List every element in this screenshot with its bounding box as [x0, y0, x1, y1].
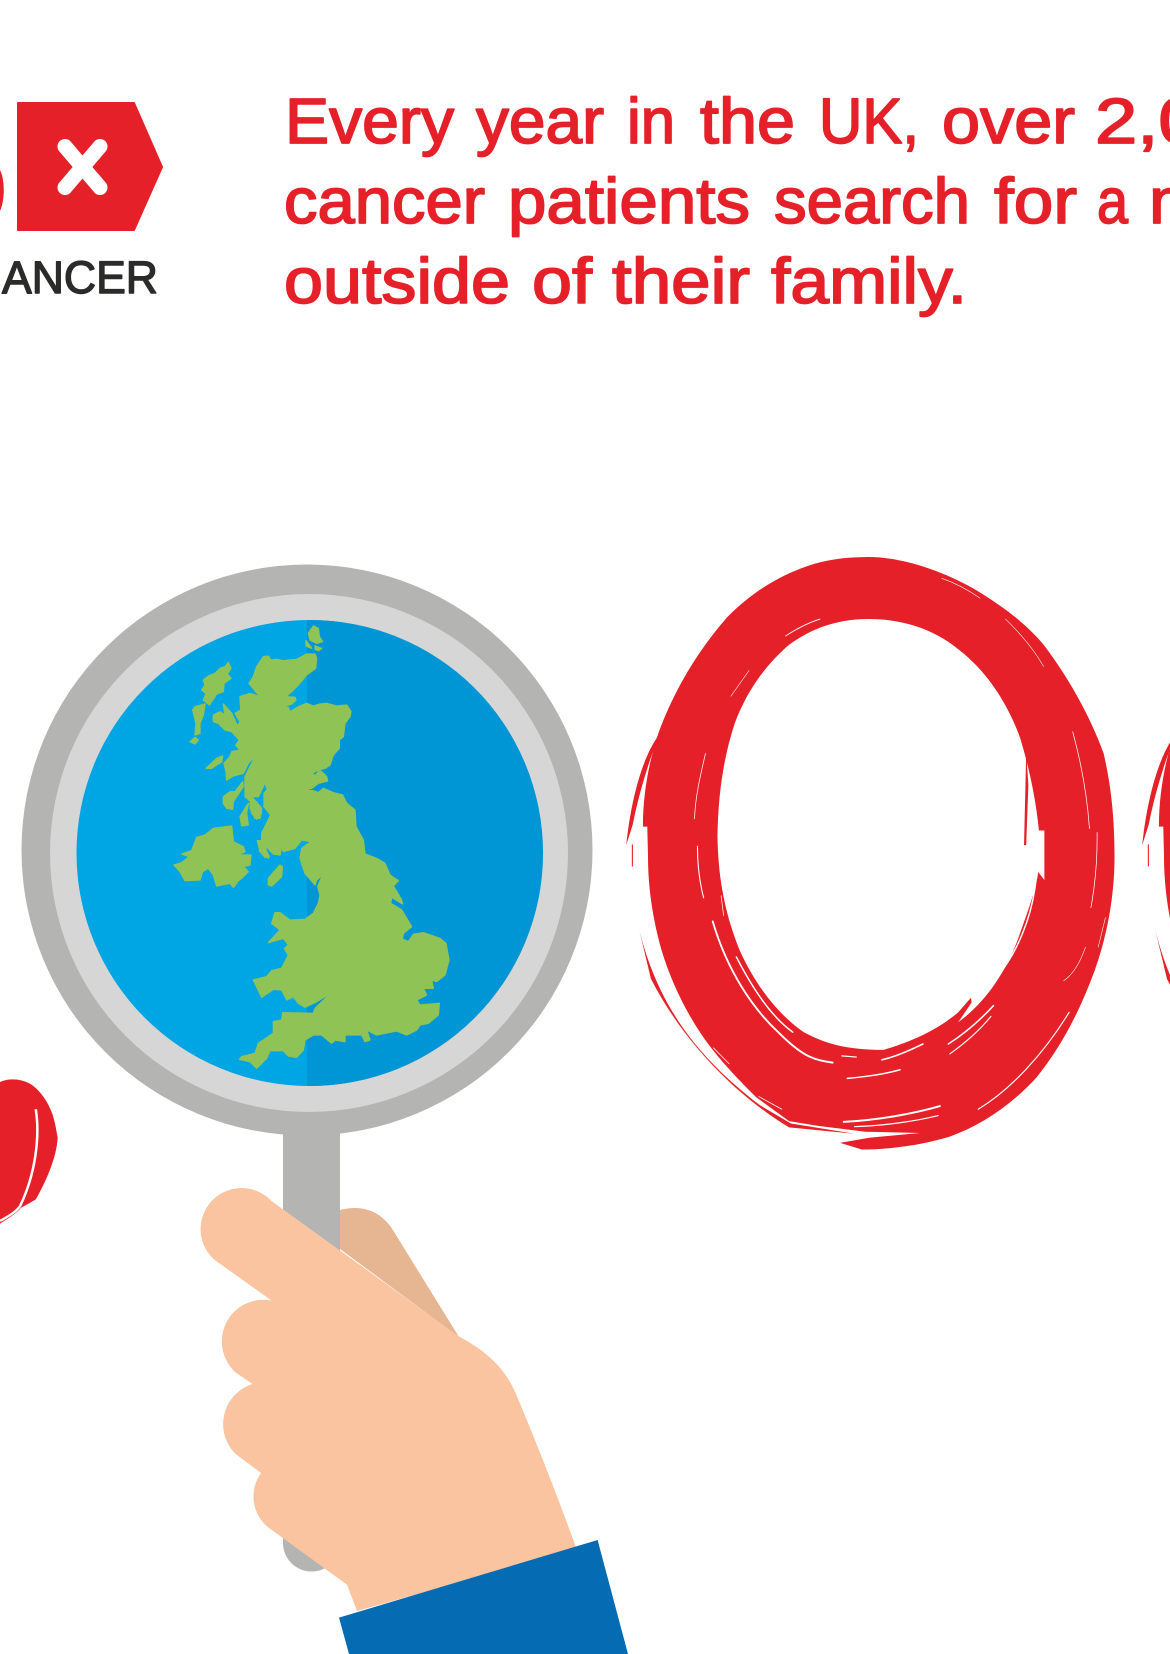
- logo: clipped red sliver: [0, 170, 4, 211]
- outer rim: [22, 564, 592, 1136]
- heading: search: [774, 165, 970, 237]
- heading: patients: [508, 165, 750, 237]
- heading: a: [1097, 165, 1128, 237]
- logo: white X: [65, 146, 100, 188]
- sleeve cuff: [339, 1540, 628, 1654]
- heading: cancer: [284, 165, 485, 237]
- inner rim: [50, 594, 568, 1112]
- brush-painted second zero clipped: [1142, 557, 1170, 1150]
- heading: their: [612, 245, 750, 317]
- lens shaded half: [307, 620, 543, 1086]
- logo: word CANCER clipped: ANCER: [2, 252, 158, 303]
- hand holding the magnifying glass: [201, 1188, 628, 1654]
- heading: UK,: [819, 85, 919, 157]
- lens: [76, 620, 542, 1086]
- logo: [0, 103, 162, 303]
- heading: Every: [285, 85, 454, 157]
- heading: the: [700, 85, 795, 157]
- magnifying glass: [22, 564, 592, 1572]
- logo: red arrow tag: [18, 103, 162, 230]
- heading: outside: [284, 245, 510, 317]
- brush-painted digit fragment left: [0, 1079, 58, 1224]
- fingers and palm: [201, 1188, 577, 1611]
- heading: of: [532, 245, 592, 317]
- heading: [284, 85, 1170, 317]
- heading: in: [627, 85, 675, 157]
- handle: [283, 1130, 340, 1572]
- heading: for: [994, 165, 1077, 237]
- heading: year: [476, 85, 604, 157]
- heading: over: [942, 85, 1075, 157]
- thumb: [340, 1208, 459, 1337]
- brush-painted zero: [626, 557, 1115, 1150]
- heading: family.: [771, 245, 967, 317]
- map of the UK: [174, 626, 449, 1068]
